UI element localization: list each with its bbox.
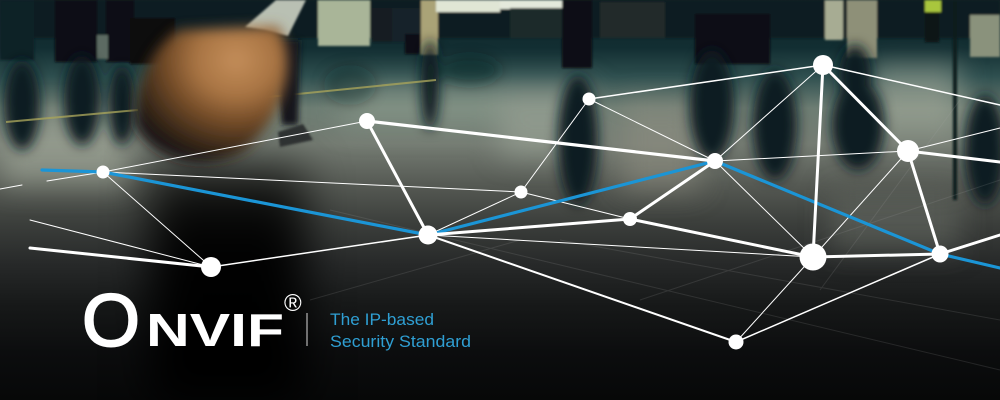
shoe [278,124,313,147]
bottom dark vertical shadow [150,165,305,400]
floor: bright reflections [0,65,960,250]
logo: ONVIF wordmark [82,279,302,362]
network: white and blue mesh [0,55,1000,350]
reflections: silhouettes on wet floor [4,40,1000,205]
thin links [0,65,1000,342]
people: top silhouettes row [0,0,1000,200]
tagline: The IP-based [330,311,434,329]
person: walking figure legs [272,40,300,125]
tagline: Security Standard [330,333,471,351]
tagline [330,311,471,351]
thick links [30,65,1000,342]
blue links [42,161,1000,268]
logo: ONVIF wordmark: NVIF [146,304,284,356]
floor tile lines [310,100,1000,370]
shirt: blurred white shirt [245,0,306,36]
divider [306,313,308,346]
nodes [96,55,948,350]
suitcase: blurred orange [135,26,288,162]
yellow floor line [6,80,436,122]
logo: ONVIF wordmark: ® [284,290,302,317]
logo: ONVIF wordmark: O [82,279,140,362]
